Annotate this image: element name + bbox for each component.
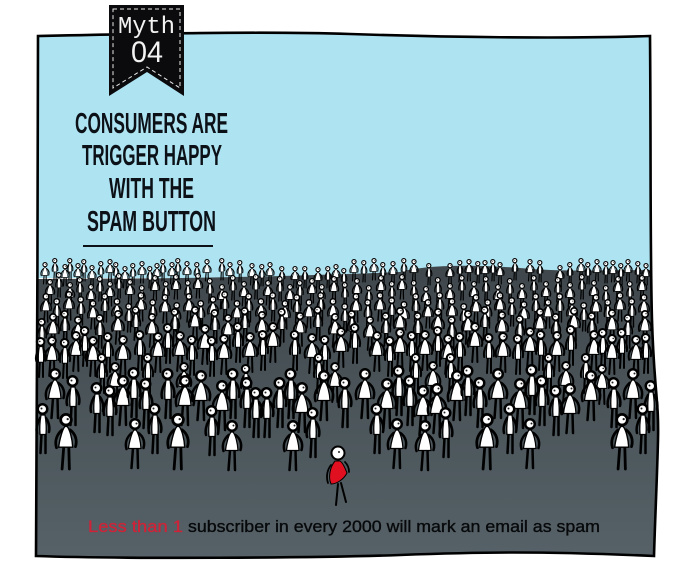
caption: Less than 1 xyxy=(88,517,183,536)
crowd of white stick figures xyxy=(36,259,657,470)
title: SPAM BUTTON xyxy=(87,206,216,238)
title xyxy=(75,108,228,238)
red figure standing apart xyxy=(327,446,349,505)
ground xyxy=(30,266,665,562)
ribbon badge: Myth 04: 04 xyxy=(131,36,163,69)
caption: subscriber in every 2000 will mark an email as spam xyxy=(188,517,600,536)
sky xyxy=(30,28,665,278)
ribbon badge: Myth 04 xyxy=(109,5,184,96)
ribbon badge: Myth 04: Myth xyxy=(118,14,175,41)
title: CONSUMERS ARE xyxy=(75,108,228,140)
title: WITH THE xyxy=(109,173,194,205)
title underline xyxy=(83,245,213,247)
title: TRIGGER HAPPY xyxy=(82,140,222,172)
